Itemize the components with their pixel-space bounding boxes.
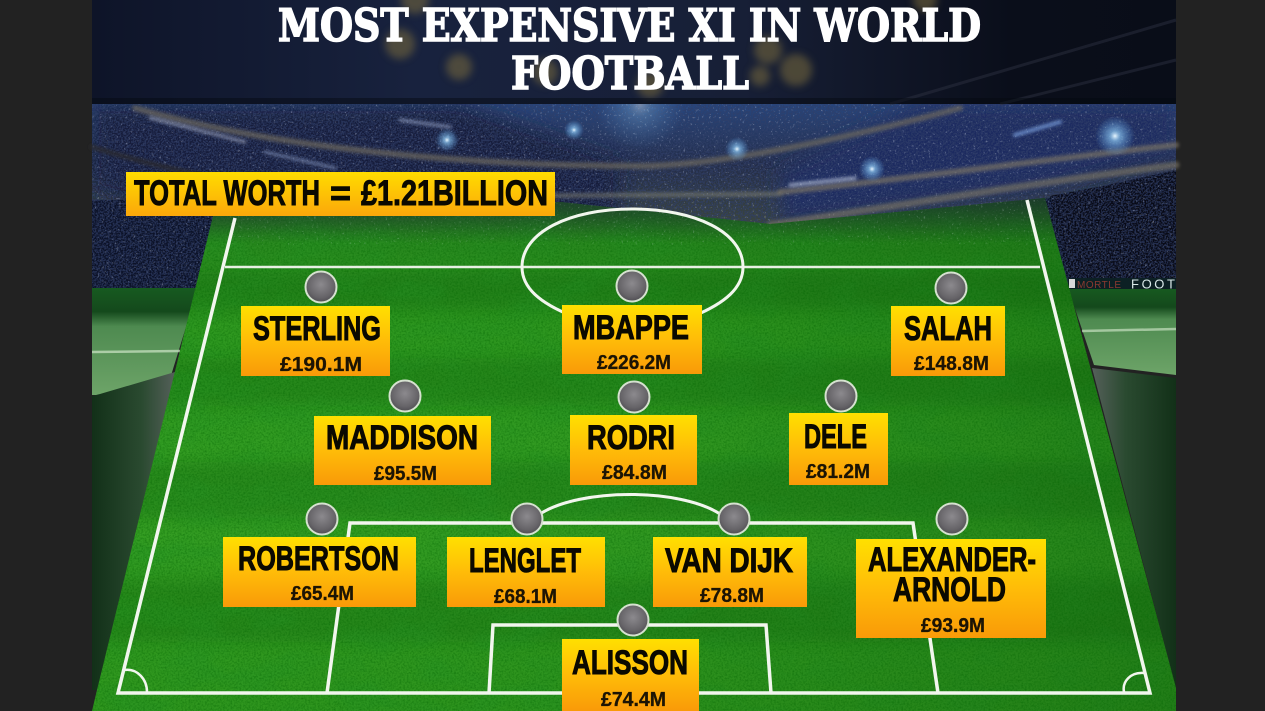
player: Alisson (562, 604, 699, 711)
side pitch right: FOOT (1131, 276, 1175, 292)
title band (92, 0, 1176, 104)
player: Sterling (241, 272, 390, 376)
player: Robertson: £65.4M (291, 583, 354, 605)
player: Dele: DELE (804, 418, 867, 456)
pitch markings (118, 200, 1150, 693)
side pitch right: MORTLE (1077, 280, 1122, 291)
side pitch left (92, 288, 198, 690)
player: Lenglet: LENGLET (469, 542, 581, 580)
player: Van Dijk (653, 504, 807, 607)
player: Van Dijk: £78.8M (700, 585, 764, 607)
total worth badge: £1.21BILLION (361, 174, 548, 213)
upper stands (92, 104, 1176, 290)
player: Dele (789, 380, 888, 485)
player: Robertson (223, 504, 416, 607)
player: Sterling: STERLING (253, 310, 381, 348)
player: Lenglet: £68.1M (494, 586, 557, 608)
player: Salah (891, 272, 1005, 376)
total worth badge: = (330, 174, 351, 213)
player: Alexander-Arnold (856, 504, 1046, 638)
player: Maddison (314, 380, 491, 485)
player: Alexander-Arnold: ARNOLD (893, 571, 1006, 609)
title text: FOOTBALL (511, 47, 749, 100)
player: Salah: £148.8M (914, 353, 989, 375)
player: Van Dijk: VAN DIJK (665, 542, 793, 580)
title text (278, 0, 981, 100)
side pitch right (1068, 276, 1176, 688)
player: Sterling: £190.1M (280, 354, 362, 376)
title text: MOST EXPENSIVE XI IN WORLD (278, 0, 981, 52)
player: Maddison: MADDISON (326, 419, 478, 457)
player: Lenglet (447, 504, 605, 608)
football pitch (92, 198, 1176, 711)
player: Mbappe: £226.2M (597, 352, 671, 374)
stadium background (92, 104, 1181, 288)
player: Rodri (570, 382, 697, 485)
player: Mbappe: MBAPPE (573, 309, 689, 347)
player: Mbappe (562, 270, 702, 374)
total worth badge (126, 172, 555, 216)
player: Alexander-Arnold: £93.9M (921, 615, 985, 637)
player: Dele: £81.2M (806, 461, 870, 483)
player: Alisson: ALISSON (572, 644, 688, 682)
total worth badge: TOTAL WORTH (134, 174, 320, 213)
player: Salah: SALAH (904, 310, 992, 348)
player: Robertson: ROBERTSON (238, 540, 399, 578)
player: Rodri: £84.8M (602, 462, 667, 484)
tier rails (92, 108, 1176, 225)
player: Alisson: £74.4M (601, 689, 666, 711)
floodlight glows (435, 60, 1135, 182)
player: Rodri: RODRI (587, 419, 675, 457)
player: Alexander-Arnold: ALEXANDER- (868, 541, 1036, 579)
player: Maddison: £95.5M (374, 463, 437, 485)
